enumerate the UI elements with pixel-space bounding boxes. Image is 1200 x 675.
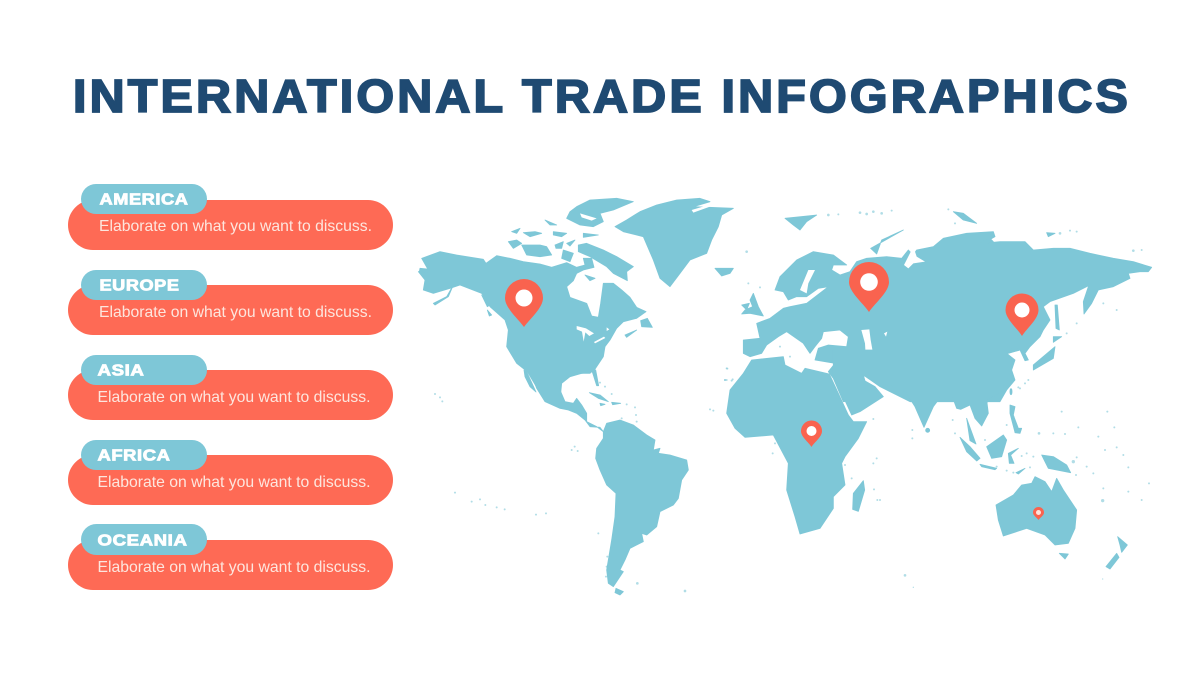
Central and South America (434, 370, 726, 595)
panel: Europe: EUROPE (100, 278, 180, 294)
icon: location pin, Asia (1006, 294, 1038, 336)
icon: location pin, Africa (801, 420, 822, 447)
panel: Africa: AFRICA (98, 448, 170, 464)
panel: Oceania: Elaborate on what you want to discuss. (98, 559, 370, 576)
North America and Greenland (418, 198, 733, 400)
panel: America: AMERICA (100, 192, 188, 208)
panel: Africa: Elaborate on what you want to discuss. (98, 474, 370, 491)
Africa, South Asia, Oceania (724, 350, 1150, 588)
icon: location pin, Australia (1033, 507, 1044, 520)
panel: region list (68, 184, 393, 590)
world map (418, 198, 1152, 595)
panel: Europe: Elaborate on what you want to discuss. (99, 304, 372, 321)
Eurasia north (715, 208, 1152, 402)
icon: location pin, Europe (849, 262, 889, 312)
panel: America: Elaborate on what you want to discuss. (99, 218, 372, 235)
panel: Asia: ASIA (98, 362, 144, 380)
panel: Oceania: OCEANIA (98, 532, 188, 550)
title: INTERNATIONAL TRADE INFOGRAPHICS (73, 70, 1131, 122)
panel: America (68, 184, 393, 250)
panel: Oceania (68, 524, 393, 590)
panel: Asia: Elaborate on what you want to discuss. (98, 389, 370, 406)
panel: Africa (68, 440, 393, 505)
panel: Europe (68, 270, 393, 335)
icon: location pin, North America (505, 279, 543, 327)
panel: Asia (68, 355, 393, 420)
